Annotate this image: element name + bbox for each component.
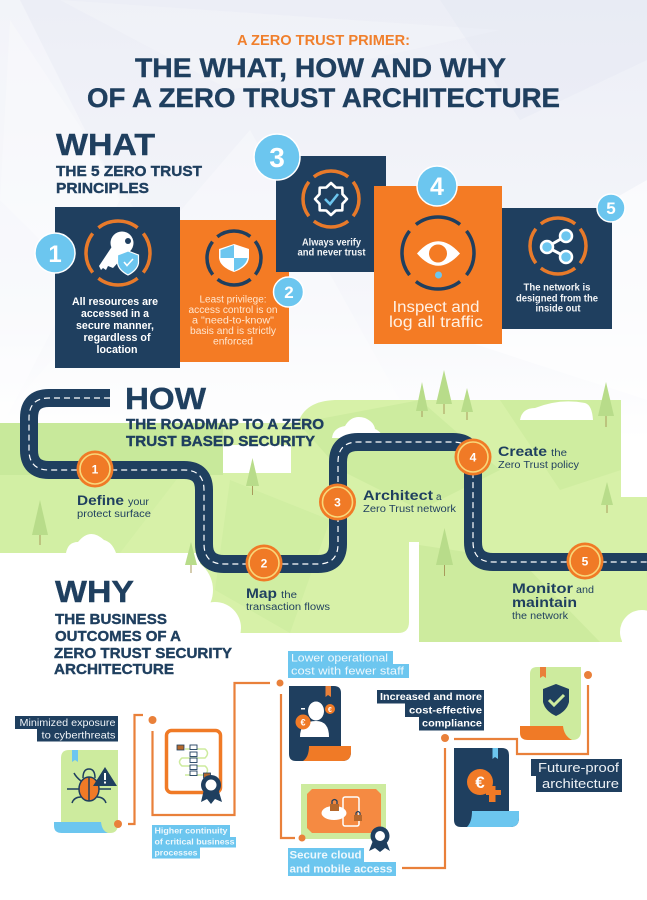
road marker 3 [319, 484, 356, 520]
number badges: 3 [269, 142, 285, 173]
heading: why: ARCHITECTURE [54, 661, 174, 678]
roadmap step 3 text [363, 487, 457, 515]
number badges: 5 [606, 199, 616, 218]
heading: what [56, 127, 202, 197]
heading: how: TRUST BASED SECURITY [126, 433, 315, 450]
heading: what: THE 5 ZERO TRUST [56, 163, 202, 180]
icon: cloud and mobile certificate [301, 784, 390, 852]
label: higher continuity [152, 825, 236, 858]
roadmap step 4 text: Create [498, 443, 547, 459]
road marker 5: 5 [582, 554, 589, 568]
heading: why: ZERO TRUST SECURITY [54, 645, 232, 662]
icon: staff cost scroll [289, 686, 351, 761]
heading: why [54, 574, 232, 678]
roadmap step 3 text: Architect [363, 487, 433, 503]
number badges: 2 [284, 283, 294, 302]
title: OF A ZERO TRUST ARCHITECTURE [87, 83, 560, 113]
road [29, 398, 647, 564]
label: future-proof: Future-proof [538, 760, 619, 775]
road marker 3: 3 [334, 496, 341, 510]
panel: principle 1: location [96, 344, 138, 356]
panel: principle 1: regardless of [84, 332, 151, 344]
roadmap step 1 text [77, 492, 151, 520]
trees [32, 370, 614, 576]
panel: principle 2: Least privilege: [200, 294, 266, 306]
heading: what: WHAT [56, 127, 155, 162]
roadmap step 2 text [246, 585, 330, 613]
road marker 4 [454, 438, 492, 476]
label: lower operational cost: cost with fewer staff [291, 666, 405, 678]
roadmap step 2 text: Map [246, 585, 277, 601]
title: THE WHAT, HOW AND WHY [135, 53, 506, 83]
panel: principle 5: inside out [536, 304, 581, 314]
panel: principle 2: enforced [213, 336, 253, 348]
panel: principle 2: a "need-to-know" [192, 316, 274, 326]
heading: how [125, 381, 324, 450]
road marker 4: 4 [470, 450, 477, 464]
roadmap step 1 text: Define [77, 492, 124, 508]
panel: principle 2 [180, 220, 289, 362]
panel: principle 2: access control is on [188, 305, 278, 316]
heading: what: PRINCIPLES [56, 180, 149, 197]
green landscape [0, 400, 647, 654]
label: future-proof [531, 759, 622, 792]
heading: why: WHY [55, 574, 134, 609]
icon: staff cost scroll: € [328, 707, 332, 714]
label: lower operational cost [288, 651, 409, 678]
label: secure cloud: Secure cloud [290, 850, 362, 862]
roadmap step 2 text: transaction flows [246, 602, 330, 613]
heading: how: HOW [125, 381, 207, 416]
icon: shield scroll [520, 667, 581, 740]
label: compliance: Increased and more [380, 692, 482, 703]
panel: principle 5: designed from the [516, 294, 598, 304]
panel: principle 1: accessed in a [81, 308, 150, 320]
panel: principle 1 [55, 207, 180, 368]
label: secure cloud: and mobile access [290, 864, 392, 876]
heading: why: THE BUSINESS [55, 611, 167, 628]
roadmap step 5 text [512, 580, 594, 622]
label: future-proof: architecture [542, 776, 619, 791]
panel: principle 3: Always verify [302, 238, 361, 248]
connector lines [114, 671, 592, 868]
road marker 5 [566, 542, 604, 580]
panel: principle 3: and never trust [298, 248, 366, 258]
roadmap step 2 text: the [281, 590, 297, 601]
panel: principle 1: secure manner, [76, 320, 154, 332]
panel: principle 4: log all traffic [389, 314, 483, 331]
road marker 2: 2 [261, 556, 268, 570]
panel: principle 2: basis and is strictly [190, 326, 276, 337]
roadmap step 5 text: and [576, 585, 594, 596]
panel: principle 4: Inspect and [392, 299, 480, 316]
label: minimized exposure: to cyberthreats [42, 730, 115, 742]
label: compliance: compliance [422, 718, 482, 730]
roadmap step 4 text: Zero Trust policy [498, 460, 579, 471]
number badges [35, 134, 625, 307]
roadmap step 4 text [498, 443, 579, 471]
roadmap step 3 text: Zero Trust network [363, 504, 457, 515]
label: higher continuity: Higher continuity [154, 826, 228, 836]
roadmap step 5 text: maintain [512, 594, 577, 610]
panel: principle 3 [276, 156, 386, 272]
icon: bug scroll [54, 750, 118, 833]
icon: process certificate [166, 730, 222, 804]
label: compliance: cost-effective [409, 706, 482, 716]
road marker 1: 1 [92, 462, 99, 476]
roadmap step 4 text: the [551, 448, 567, 459]
label: compliance [377, 690, 484, 730]
label: higher continuity: processes [154, 848, 198, 858]
roadmap step 1 text: your [128, 497, 150, 508]
icon: euro scroll: € [475, 773, 485, 792]
heading: how: THE ROADMAP TO A ZERO [126, 416, 324, 433]
icon: staff cost scroll: € [300, 718, 306, 728]
roadmap step 5 text: the network [512, 611, 569, 622]
heading: why: OUTCOMES OF A [55, 628, 181, 645]
title: A ZERO TRUST PRIMER: [237, 32, 410, 49]
title [87, 32, 560, 113]
label: minimized exposure [15, 716, 118, 742]
road marker 2 [246, 544, 282, 582]
icon: euro scroll [454, 748, 519, 827]
number badges: 1 [48, 241, 62, 268]
panel: principle 1: All resources are [72, 296, 158, 308]
label: lower operational cost: Lower operational [291, 652, 388, 664]
label: secure cloud [288, 848, 396, 876]
label: higher continuity: of critical business [154, 836, 235, 846]
roadmap step 1 text: protect surface [77, 509, 151, 520]
number badges: 4 [430, 173, 444, 201]
road marker 1 [76, 450, 114, 488]
label: minimized exposure: Minimized exposure [20, 717, 116, 729]
panel: principle 4 [374, 186, 502, 344]
roadmap step 3 text: a [436, 492, 442, 503]
panel: principle 5: The network is [524, 282, 591, 294]
panel: principle 5 [502, 208, 612, 329]
roadmap step 5 text: Monitor [512, 580, 574, 596]
